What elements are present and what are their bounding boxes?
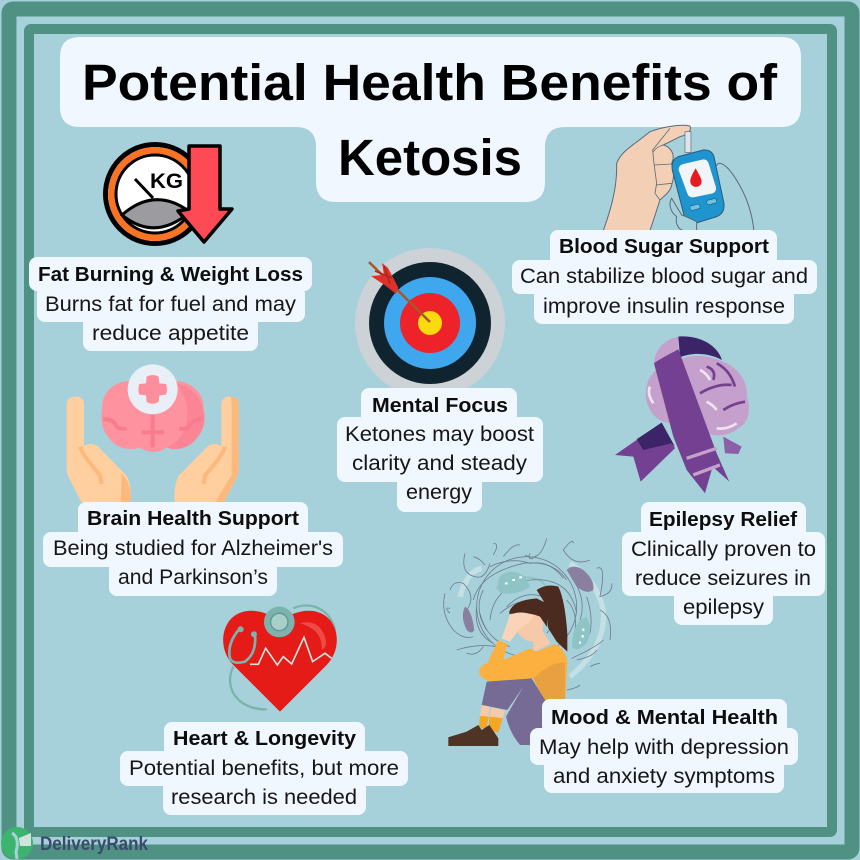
woman figure xyxy=(448,586,567,746)
icon: weight scale with down arrow xyxy=(106,144,232,244)
logo: DeliveryRank xyxy=(1,827,148,859)
panel: mood and mental health: and anxiety symptoms xyxy=(553,765,775,788)
panel: mood and mental health: May help with depression xyxy=(539,736,789,759)
icon: heart with stethoscope xyxy=(223,605,337,712)
panel: heart and longevity: Heart & Longevity xyxy=(173,728,357,750)
panel: brain health support: Brain Health Support xyxy=(87,508,299,530)
panel: heart and longevity: Potential benefits, but more xyxy=(129,757,399,780)
panel: brain health support: Being studied for Alzheimer's xyxy=(53,537,333,560)
panel: fat burning and weight loss: Burns fat for fuel and may xyxy=(45,293,297,316)
panel: epilepsy relief: Clinically proven to xyxy=(631,538,816,561)
panel: mental focus: clarity and steady xyxy=(352,452,528,475)
icon: hands holding brain xyxy=(67,364,239,503)
panel: blood sugar support: Blood Sugar Support xyxy=(559,236,769,258)
title xyxy=(60,37,801,202)
panel: mental focus xyxy=(337,388,543,512)
title: Potential Health Benefits of xyxy=(82,54,778,111)
icon: weight scale with down arrow: KG xyxy=(150,170,183,193)
panel: mental focus: Ketones may boost xyxy=(345,423,534,446)
panel: fat burning and weight loss: Fat Burning & Weight Loss xyxy=(38,264,303,286)
panel: mental focus: Mental Focus xyxy=(372,395,508,417)
title: Ketosis xyxy=(338,129,522,186)
icon: stressed woman with swirling thoughts xyxy=(444,538,612,746)
icon: purple ribbon with brain xyxy=(615,336,749,493)
panel: fat burning and weight loss xyxy=(29,257,312,351)
panel: mental focus: energy xyxy=(406,481,473,504)
panel: epilepsy relief: epilepsy xyxy=(683,596,765,619)
panel: epilepsy relief: Epilepsy Relief xyxy=(649,509,797,531)
panel: heart and longevity xyxy=(120,722,408,815)
panel: heart and longevity: research is needed xyxy=(171,786,357,809)
icon: archery target with arrow xyxy=(355,248,505,398)
panel: blood sugar support: improve insulin response xyxy=(543,295,785,318)
panel: epilepsy relief xyxy=(622,502,825,625)
panel: epilepsy relief: reduce seizures in xyxy=(635,567,811,590)
panel: mood and mental health: Mood & Mental Health xyxy=(551,707,778,729)
logo: DeliveryRank: DeliveryRank xyxy=(40,834,148,855)
panel: fat burning and weight loss: reduce appetite xyxy=(92,322,249,345)
icon: blood glucose meter in hands xyxy=(603,125,754,232)
panel: blood sugar support: Can stabilize blood sugar and xyxy=(520,265,808,288)
panel: blood sugar support xyxy=(512,230,817,324)
panel: brain health support: and Parkinson’s xyxy=(118,566,268,589)
panel: mood and mental health xyxy=(530,699,798,793)
panel: brain health support xyxy=(43,502,343,596)
